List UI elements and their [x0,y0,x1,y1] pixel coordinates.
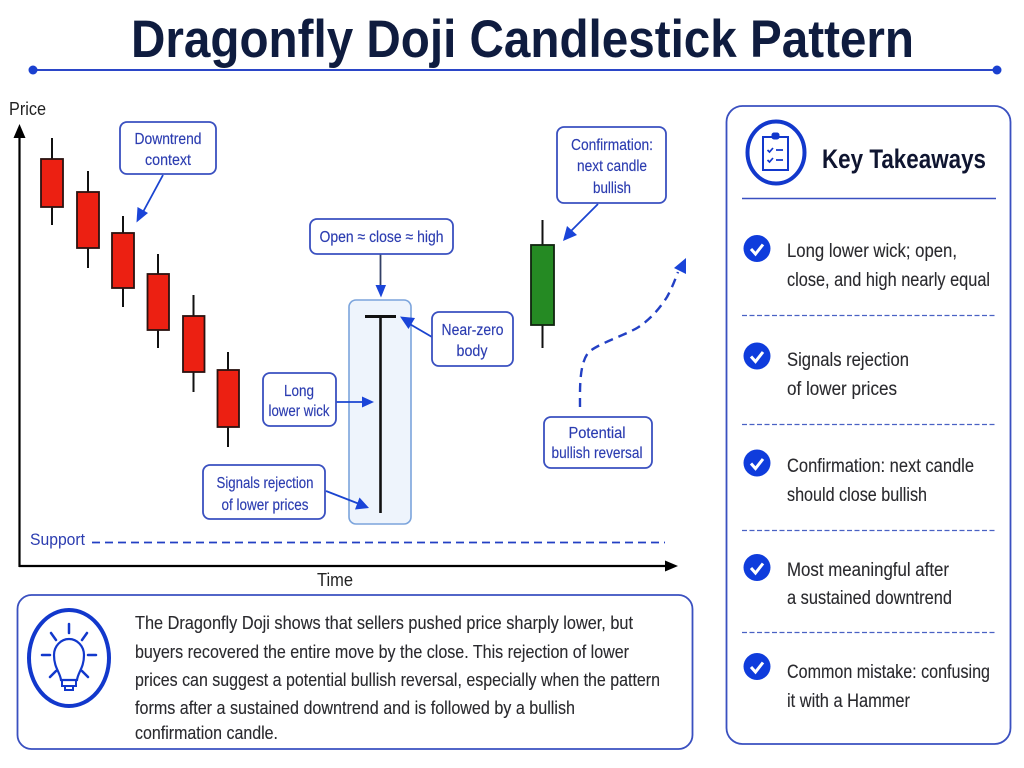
arrow: downtrend [136,175,163,222]
takeaway 3: should close bullish [787,485,927,506]
callout: downtrend [120,122,216,174]
takeaway 3: Confirmation: next candle [787,456,974,477]
candle 6 [218,352,239,447]
title: Dragonfly Doji Candlestick Pattern [131,10,914,69]
y axis label: Price [9,99,46,119]
takeaway 1: Long lower wick; open, [787,241,957,262]
takeaway 2: of lower prices [787,379,897,400]
takeaway 4: Most meaningful after [787,560,950,581]
summary text: forms after a sustained downtrend and is followed by a bullish [135,698,575,718]
candle 2 [77,171,99,268]
callout: near-zero body [432,312,513,366]
arrow: near-zero body [400,316,432,337]
callout: signals rejection: of lower prices [222,497,308,514]
divider [742,314,996,316]
icon: lightbulb [29,610,109,706]
callout: near-zero body: Near-zero [442,322,504,339]
candle 5 [183,295,204,392]
callout: open close high [310,219,453,254]
price axis arrow [14,124,26,567]
takeaway 5: it with a Hammer [787,691,911,712]
arrow: long lower wick [336,396,374,408]
dragonfly doji candle [365,316,396,513]
takeaway 5 [744,653,990,712]
callout: downtrend: Downtrend [134,131,202,148]
arrow: confirmation [563,204,598,241]
green candle [531,220,554,348]
takeaway 2 [744,342,909,400]
heading: Key Takeaways [822,144,986,174]
panel: summary [18,595,692,749]
support label: Support [30,530,85,549]
divider [742,530,996,532]
arrow: potential reversal [580,258,686,407]
callout: near-zero body: body [456,343,488,360]
callout: confirmation: next candle [577,158,647,175]
icon: clipboard [748,122,804,184]
summary text [135,613,660,743]
heading rule [742,198,996,200]
title underline [28,66,1002,74]
takeaway 4: a sustained downtrend [787,588,952,609]
takeaway 2: Signals rejection [787,350,909,371]
summary text: prices can suggest a potential bullish reversal, especially when the pattern [135,670,660,690]
summary text: confirmation candle. [135,723,278,743]
x axis label: Time [317,570,353,590]
callout: open close high: Open ≈ close ≈ high [320,229,444,246]
takeaway 1 [744,235,990,291]
chart [9,99,686,590]
arrow: signals rejection [326,491,369,510]
summary text: The Dragonfly Doji shows that sellers pushed price sharply lower, but [135,613,633,633]
callout: confirmation: bullish [593,180,631,197]
takeaway 4 [744,554,952,609]
divider [742,632,996,634]
doji highlight [349,300,411,524]
callout: confirmation [557,127,666,203]
callout: long lower wick: lower wick [268,403,330,420]
candle 1 [41,138,63,225]
takeaway 1: close, and high nearly equal [787,270,990,291]
callout: long lower wick: Long [284,383,314,400]
arrow: open close high [376,254,386,298]
divider [742,424,996,426]
time axis arrow [19,560,678,572]
callout: potential reversal: Potential [568,425,626,442]
callout: long lower wick [263,373,336,426]
panel: key takeaways [726,106,1010,744]
callout: confirmation: Confirmation: [571,137,653,154]
callout: signals rejection: Signals rejection [216,475,314,492]
callout: signals rejection [203,465,325,519]
candle 3 [112,216,134,307]
takeaway 3 [744,450,974,506]
callout: potential reversal: bullish reversal [552,445,642,462]
callout: potential reversal [544,417,652,468]
summary text: buyers recovered the entire move by the close. This rejection of lower [135,642,629,662]
callout: downtrend: context [145,152,191,169]
support line [92,542,665,544]
candle 4 [148,254,169,348]
takeaway 5: Common mistake: confusing [787,662,990,683]
